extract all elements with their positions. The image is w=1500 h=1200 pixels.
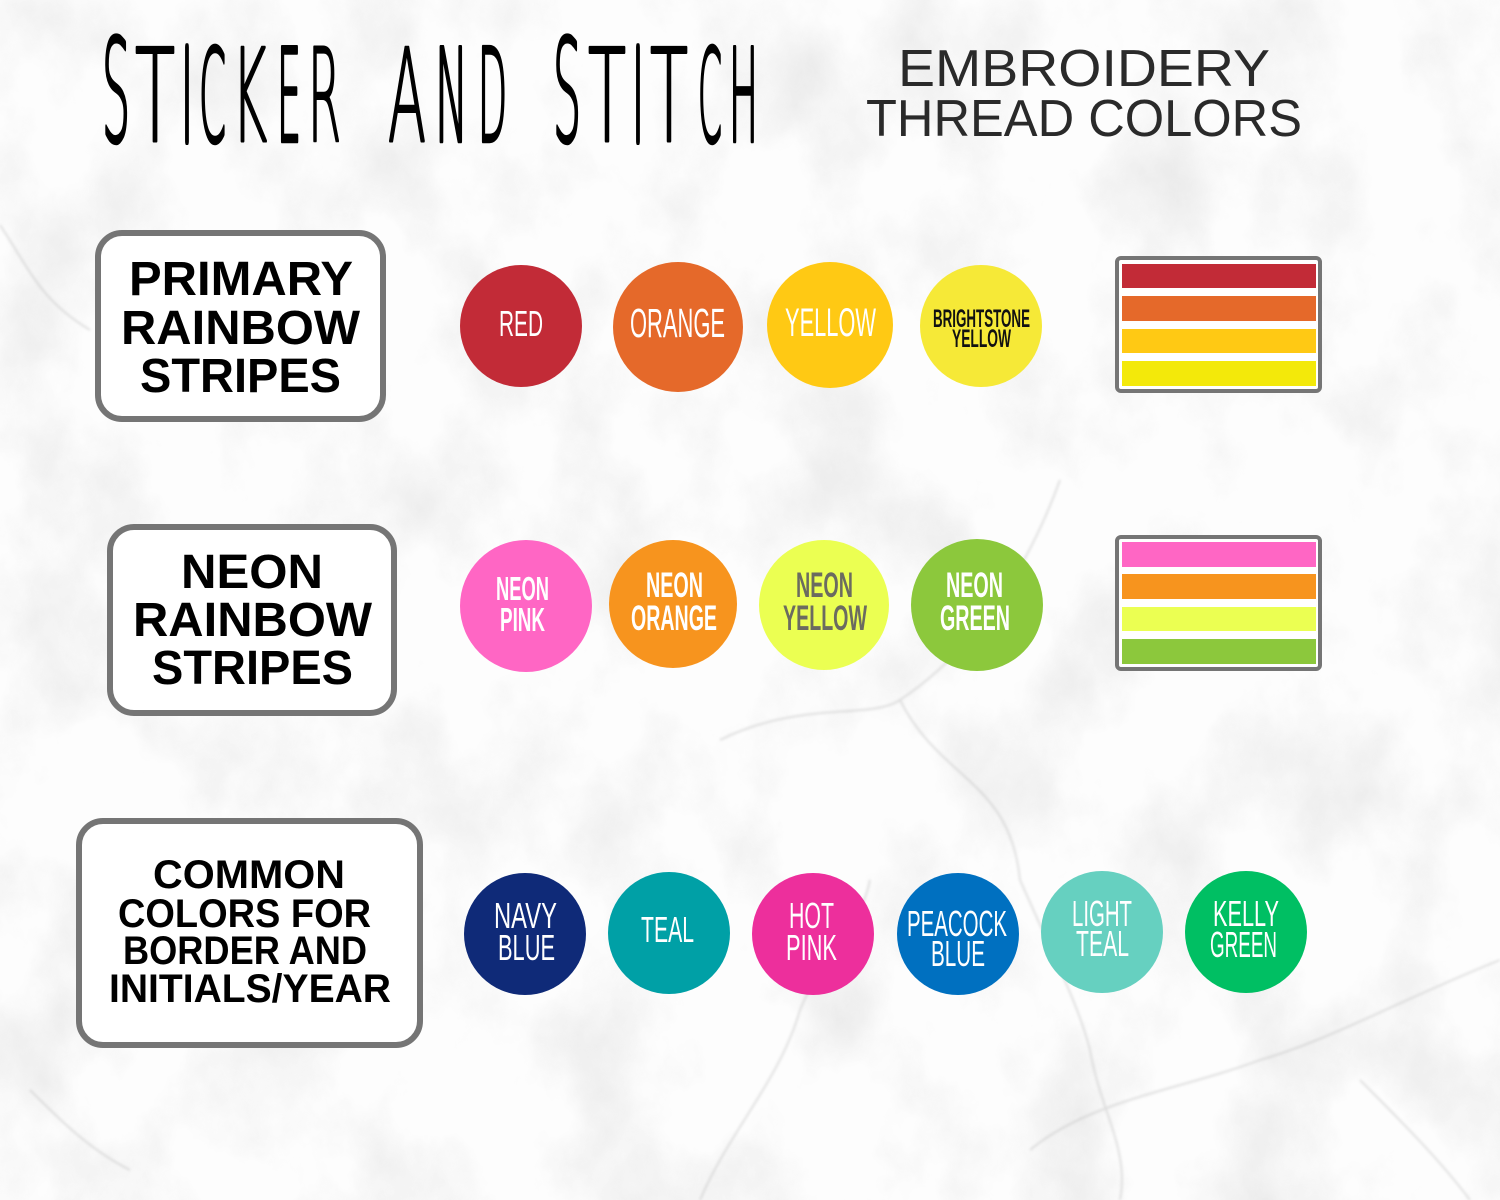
swatch: neon yellow: NEON <box>796 566 853 605</box>
swatch: red <box>460 265 582 387</box>
panel: primary rainbow stripes label: RAINBOW <box>121 302 361 355</box>
swatch: kelly green: KELLY <box>1213 893 1279 934</box>
swatch: light teal: TEAL <box>1076 923 1129 964</box>
swatch: teal: TEAL <box>641 909 694 950</box>
swatch: yellow: YELLOW <box>785 301 876 345</box>
title: Sticker and Stitch: R <box>308 23 341 172</box>
title: Sticker and Stitch: T <box>135 23 175 172</box>
panel: primary rainbow stripes label: STRIPES <box>140 350 341 403</box>
swatch: teal <box>608 872 730 994</box>
title: Sticker and Stitch: T <box>650 23 688 172</box>
swatch: neon orange: ORANGE <box>631 599 717 638</box>
title: Sticker and Stitch: N <box>435 23 468 172</box>
swatch: hot pink: PINK <box>786 927 837 968</box>
title: Sticker and Stitch: C <box>199 23 226 172</box>
swatch: brightstone yellow: BRIGHTSTONE <box>933 305 1030 333</box>
swatch: kelly green <box>1185 871 1307 993</box>
swatch: peacock blue: PEACOCK <box>907 903 1007 944</box>
swatch: navy blue: BLUE <box>498 927 555 968</box>
swatch: hot pink <box>752 873 874 995</box>
panel: common colors label: INITIALS/YEAR <box>109 967 391 1011</box>
swatch: peacock blue: BLUE <box>931 933 985 974</box>
panel: neon rainbow stripes label: NEON <box>181 546 323 599</box>
swatch: neon orange: NEON <box>646 566 703 605</box>
panel: common colors label: COLORS FOR <box>118 892 371 936</box>
swatch: red: RED <box>499 303 543 344</box>
swatch: neon orange <box>609 540 737 668</box>
swatch: hot pink: HOT <box>789 895 834 936</box>
subtitle: Embroidery Thread Colors: THREAD COLORS <box>866 90 1302 148</box>
swatch: light teal <box>1041 871 1163 993</box>
swatch: neon pink: PINK <box>500 601 545 638</box>
subtitle: Embroidery Thread Colors: EMBROIDERY <box>898 40 1270 98</box>
swatch: neon green <box>911 539 1043 671</box>
panel: neon rainbow stripes label: STRIPES <box>152 642 353 695</box>
swatch: neon yellow: YELLOW <box>783 599 867 638</box>
swatch: brightstone yellow: YELLOW <box>952 325 1011 353</box>
title: Sticker and Stitch: S <box>553 10 581 175</box>
title: Sticker and Stitch: S <box>102 10 130 175</box>
title: Sticker and Stitch: I <box>633 23 643 172</box>
swatch: navy blue <box>464 873 586 995</box>
title: Sticker and Stitch: A <box>388 23 426 172</box>
swatch: neon green: GREEN <box>940 599 1010 638</box>
flag: primary rainbow stripes <box>1117 258 1320 391</box>
subtitle: Embroidery Thread Colors <box>866 40 1302 148</box>
swatch: peacock blue <box>897 873 1019 995</box>
panel: neon rainbow stripes label: RAINBOW <box>133 594 373 647</box>
text: H <box>729 23 758 172</box>
panel: common colors label: COMMON <box>153 853 345 897</box>
title: Sticker and Stitch: D <box>478 23 507 172</box>
swatch: neon pink: NEON <box>496 570 549 607</box>
title: Sticker and Stitch: K <box>232 23 267 172</box>
swatch: yellow <box>767 262 893 388</box>
panel: common colors label <box>79 821 420 1045</box>
swatch: light teal: LIGHT <box>1072 893 1132 934</box>
swatch: orange <box>613 262 743 392</box>
panel: primary rainbow stripes label <box>98 233 383 419</box>
title: Sticker and Stitch: T <box>588 23 626 172</box>
panel: neon rainbow stripes label <box>110 527 394 713</box>
title: Sticker and Stitch: C <box>698 23 722 172</box>
swatch: neon green: NEON <box>946 566 1003 605</box>
flag: neon rainbow stripes <box>1117 537 1320 669</box>
swatch: neon yellow <box>759 540 889 670</box>
swatch: brightstone yellow <box>920 265 1042 387</box>
swatch: neon pink <box>460 540 592 672</box>
panel: common colors label: BORDER AND <box>123 929 367 973</box>
title: Sticker and Stitch <box>102 10 758 175</box>
swatch: navy blue: NAVY <box>494 895 557 936</box>
swatch: orange: ORANGE <box>630 300 725 346</box>
title: Sticker and Stitch: E <box>277 23 301 172</box>
title: Sticker and Stitch: I <box>182 23 192 172</box>
panel: primary rainbow stripes label: PRIMARY <box>129 253 353 306</box>
swatch: kelly green: GREEN <box>1210 924 1277 965</box>
